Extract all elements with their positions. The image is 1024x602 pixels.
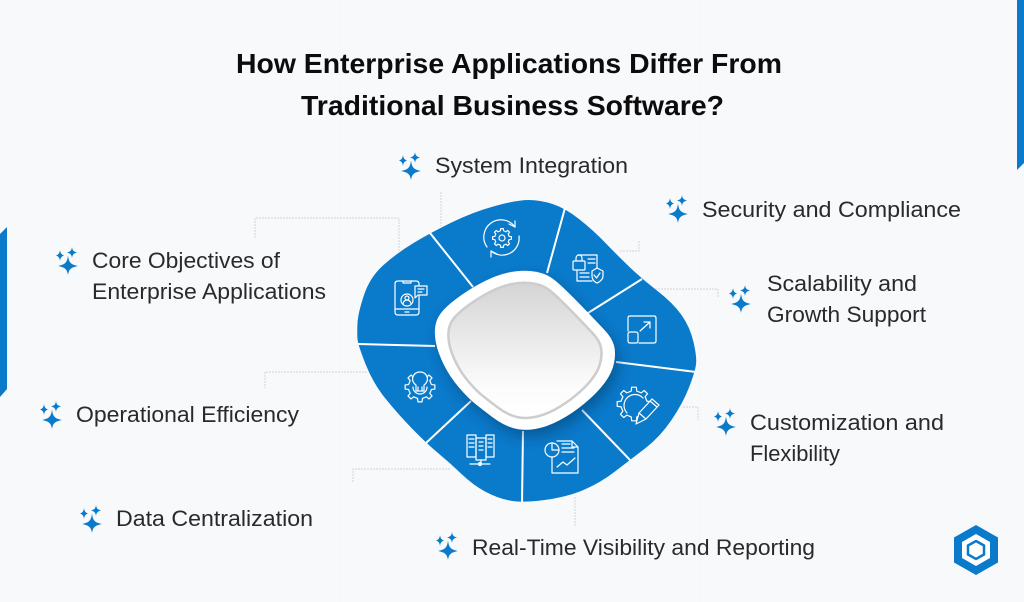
left accent bar <box>0 227 7 397</box>
label: Scalability and Growth Support: Growth Support <box>767 302 926 327</box>
label: Core Objectives of Enterprise Applications <box>56 247 326 304</box>
centre inner grey shape <box>448 283 602 418</box>
label: Scalability and Growth Support <box>729 271 926 327</box>
connector lines <box>255 192 718 527</box>
icon: sync gear <box>484 220 519 257</box>
label: Data Centralization: Data Centralization <box>116 506 313 531</box>
label: Core Objectives of Enterprise Applications: Enterprise Applications <box>92 279 326 304</box>
label: System Integration: System Integration <box>435 153 628 178</box>
logo <box>954 525 998 575</box>
icon: servers <box>467 435 494 466</box>
segment dividers <box>358 208 696 503</box>
label: Customization and Flexibility <box>714 408 944 466</box>
icon: resize <box>628 316 656 343</box>
label: Core Objectives of Enterprise Applications: Core Objectives of <box>92 248 281 273</box>
title: How Enterprise Applications Differ From <box>236 48 782 79</box>
label: Customization and Flexibility: Customization and <box>750 410 944 435</box>
title: Traditional Business Software? <box>301 90 724 121</box>
title <box>236 48 782 121</box>
label: Scalability and Growth Support: Scalability and <box>767 271 917 296</box>
label: Real-Time Visibility and Reporting: Real-Time Visibility and Reporting <box>472 535 815 560</box>
icon: report <box>545 441 578 473</box>
ring shape <box>357 200 696 502</box>
centre white shape <box>435 271 615 430</box>
label: Operational Efficiency: Operational Efficiency <box>76 402 299 427</box>
icon: gear with bulb <box>405 372 435 402</box>
label: Security and Compliance: Security and Compliance <box>702 197 961 222</box>
icon: gear with pencil <box>617 387 659 424</box>
icon: security documents <box>573 255 603 283</box>
segmented blue ring diagram <box>357 200 696 503</box>
right accent bar <box>1017 0 1024 170</box>
label: Customization and Flexibility: Flexibility <box>750 441 840 466</box>
icon: phone with chat <box>395 281 427 315</box>
